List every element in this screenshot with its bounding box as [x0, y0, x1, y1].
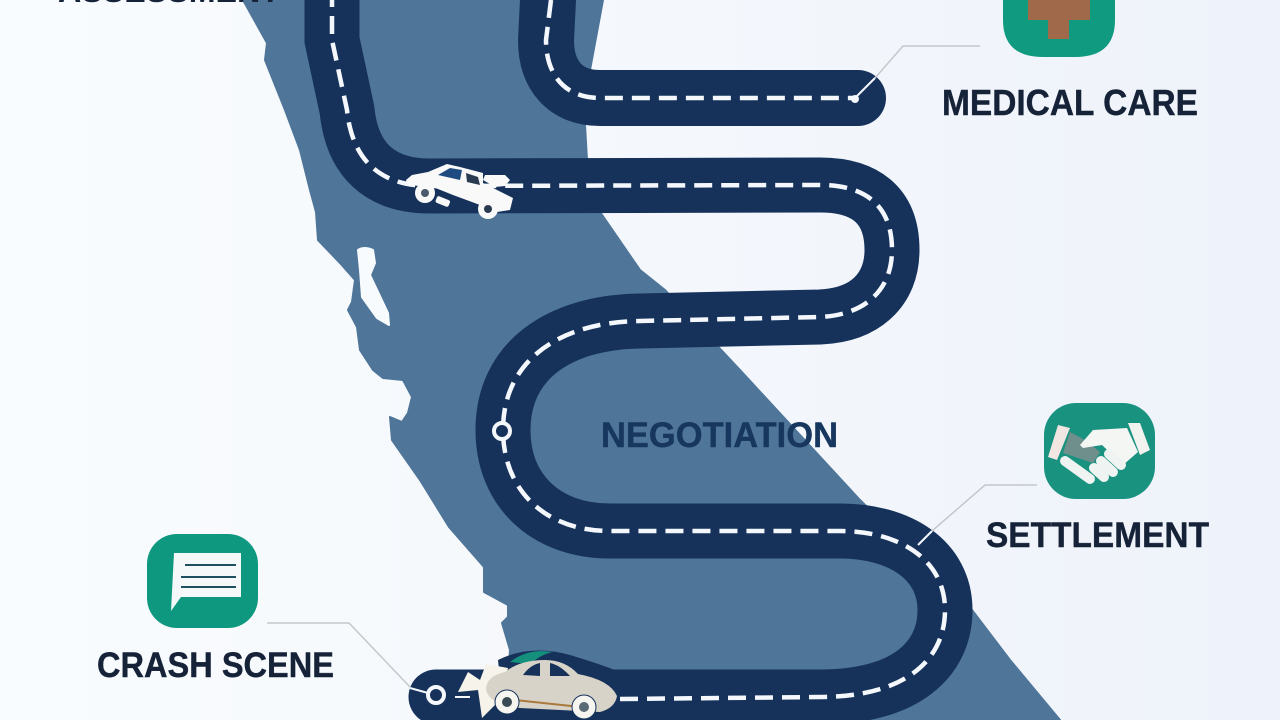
callout: settlement	[918, 403, 1209, 555]
main road	[332, 0, 945, 699]
car: crashed sedan at crash scene	[458, 651, 620, 719]
map: bay inlet	[358, 248, 389, 325]
waypoint: negotiation marker	[494, 423, 510, 439]
waypoint: crash start marker	[410, 687, 470, 703]
upper road dashes	[546, 0, 855, 98]
map: California silhouette	[243, 0, 1060, 720]
icon: handshake	[1044, 403, 1155, 499]
car: damaged white pickup on road	[406, 164, 513, 219]
main road centre dashes	[332, 0, 945, 699]
callout: crash scene	[97, 534, 410, 687]
label: crash scene: CRASH SCENE	[97, 646, 334, 685]
label: negotiation: NEGOTIATION	[601, 416, 838, 455]
label: settlement: SETTLEMENT	[986, 516, 1209, 555]
callout: medical care	[851, 0, 1198, 123]
icon: medical cross	[1003, 0, 1115, 57]
upper road branch	[546, 0, 858, 98]
icon: chat bubble	[147, 534, 258, 628]
label: medical care: MEDICAL CARE	[942, 82, 1198, 123]
